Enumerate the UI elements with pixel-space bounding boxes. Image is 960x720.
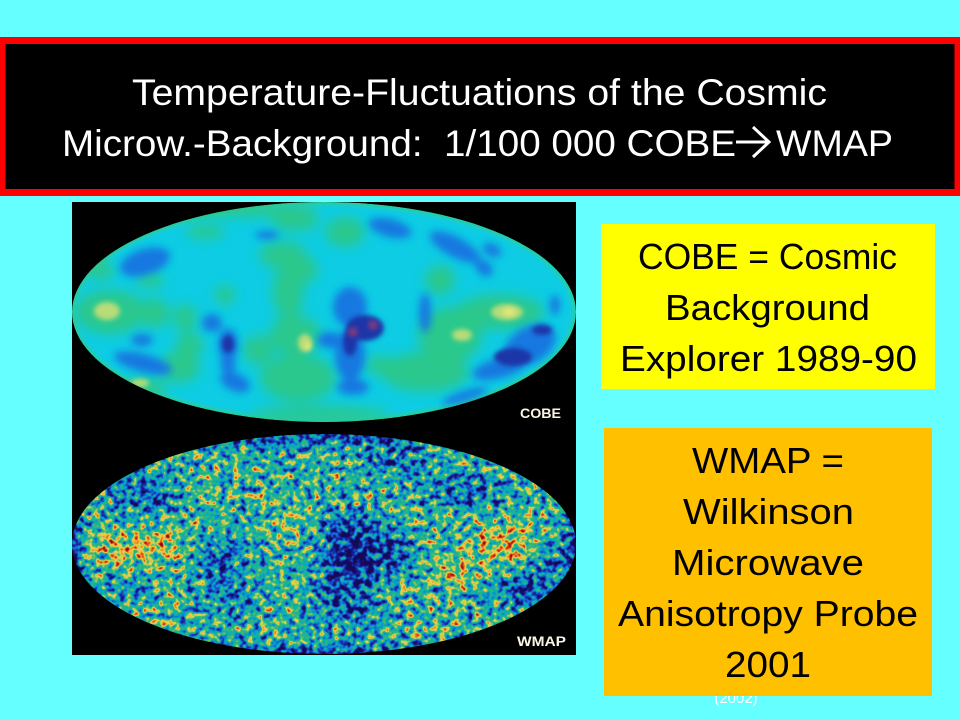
sky maps image panel (72, 202, 576, 655)
hidden citation year: (2002) (714, 690, 758, 707)
title banner (2, 40, 958, 192)
WMAP text line 2: Wilkinson (683, 491, 854, 532)
WMAP text line 5: 2001 (725, 644, 811, 685)
COBE text line 3: Explorer 1989-90 (620, 338, 917, 379)
COBE text line 1: COBE = Cosmic (638, 236, 897, 277)
WMAP sky map (72, 434, 576, 655)
WMAP text line 1: WMAP = (692, 440, 844, 481)
title line 2 end: WMAP (776, 123, 893, 164)
WMAP label: WMAP (517, 634, 566, 649)
WMAP text line 4: Anisotropy Probe (618, 593, 918, 634)
COBE sky map (72, 202, 576, 422)
COBE label: COBE (520, 406, 561, 421)
WMAP text line 3: Microwave (672, 542, 864, 583)
arrow: COBE to WMAP (736, 127, 769, 157)
COBE definition box (601, 224, 935, 389)
COBE text line 2: Background (665, 287, 870, 328)
title line 2: Microw.-Background: 1/100 000 COBE (62, 123, 736, 164)
WMAP definition box (604, 428, 932, 696)
title line 1: Temperature-Fluctuations of the Cosmic (132, 72, 827, 113)
